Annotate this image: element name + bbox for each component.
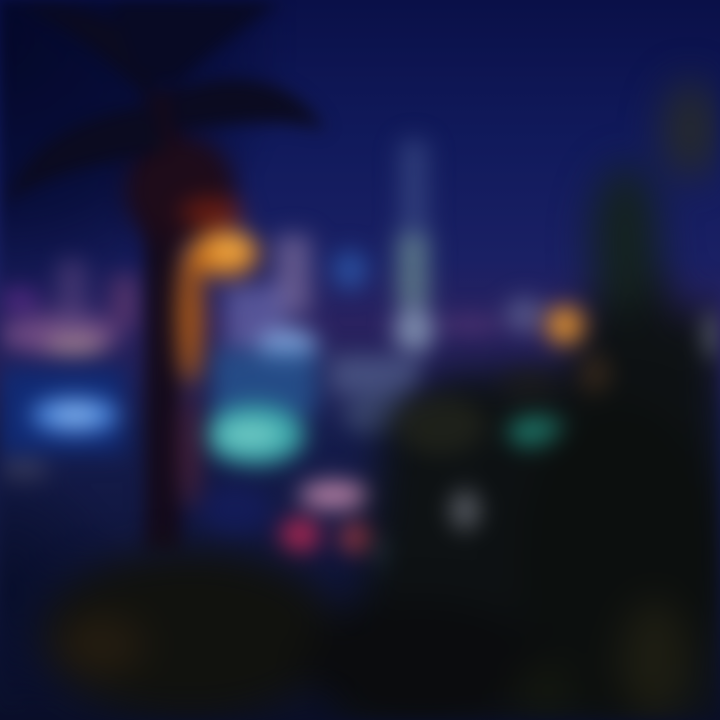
foreground bushes — [40, 400, 720, 720]
distant skyline glow — [0, 140, 545, 357]
palm tree silhouette — [5, 0, 325, 550]
palm crown — [125, 135, 235, 245]
right foliage highlight lights — [395, 305, 720, 530]
pink and red city lights — [199, 481, 404, 572]
right foliage silhouette — [340, 80, 720, 720]
orange lamp glow on palm — [177, 198, 259, 510]
waterfront light reflections — [0, 329, 420, 480]
palm fronds — [5, 0, 325, 205]
dark lower left shore — [0, 460, 130, 720]
palm trunk — [145, 90, 181, 550]
sky shading — [0, 0, 300, 330]
